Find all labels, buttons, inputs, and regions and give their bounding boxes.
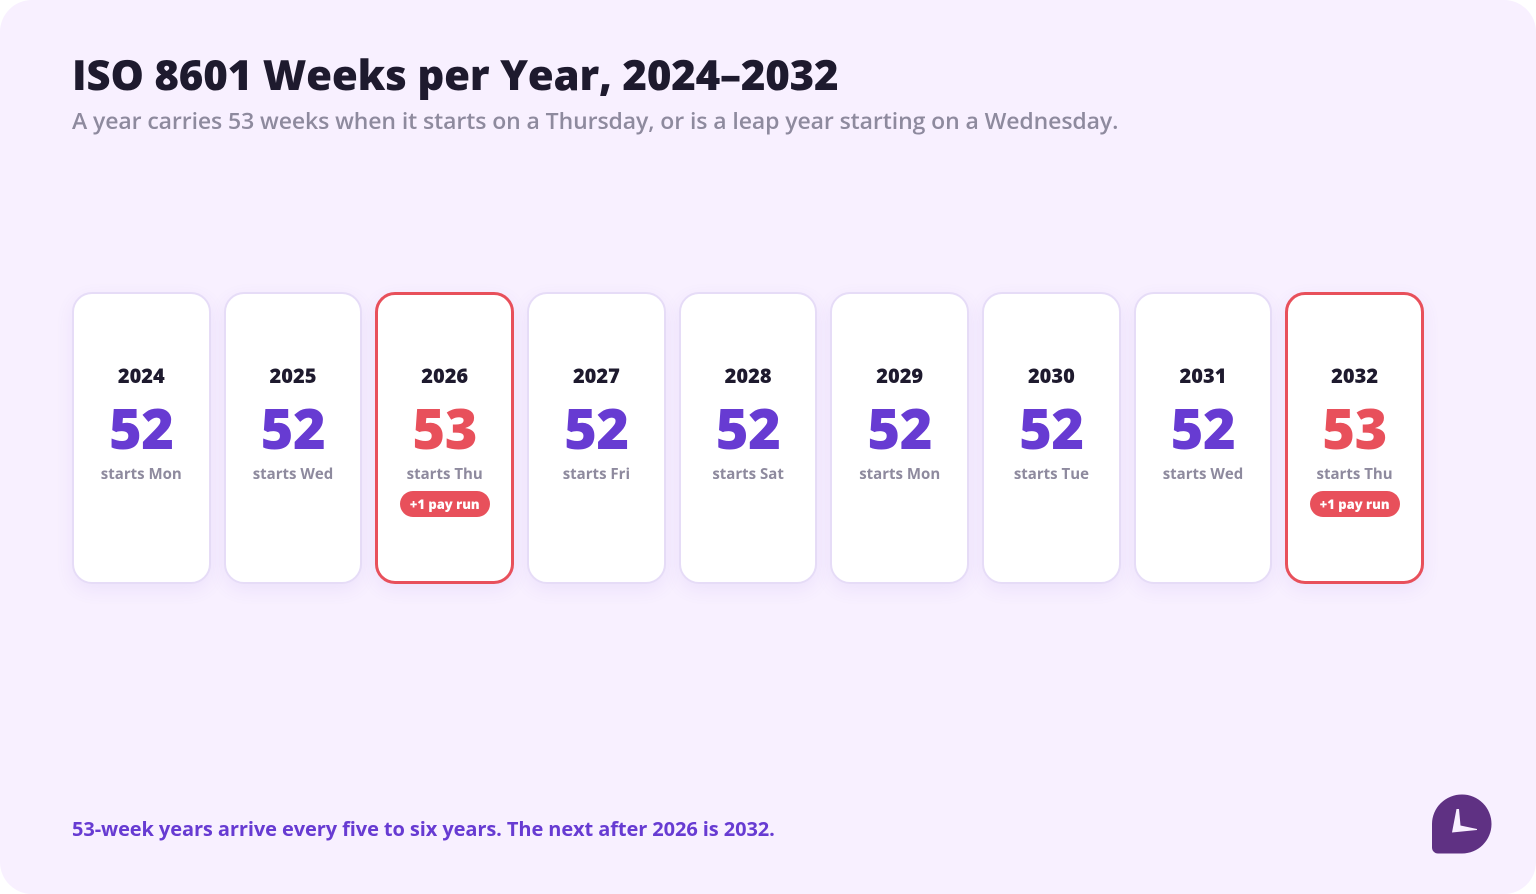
card: 2024: starts Mon [101, 464, 182, 484]
card: 2028: starts Sat [712, 464, 784, 484]
card: 2027: 52 [564, 390, 629, 466]
card: 2031 [1134, 292, 1272, 584]
footer takeaway: 53-week years arrive every five to six years. The next after 2026 is 2032. [72, 815, 775, 842]
card: 2031: 2031 [1180, 362, 1226, 389]
card: 2027: starts Fri [563, 464, 630, 484]
card: 2029: starts Mon [859, 464, 940, 484]
card: 2032 highlighted: +1 pay run [1320, 495, 1390, 513]
card: 2026 highlighted: 53 [412, 390, 477, 466]
card: 2029 [830, 292, 969, 584]
card: 2030: 52 [1019, 390, 1084, 466]
title: ISO 8601 Weeks per Year, 2024–2032 [72, 46, 838, 103]
card: 2030: 2030 [1028, 362, 1075, 389]
card: 2029: 52 [867, 390, 932, 466]
card: 2031: starts Wed [1163, 464, 1243, 484]
card: 2024: 2024 [118, 362, 165, 389]
card: 2031: 52 [1171, 390, 1235, 466]
card: 2026 highlighted: +1 pay run [410, 495, 480, 513]
card: 2024: 52 [109, 390, 174, 466]
card: 2028: 52 [716, 390, 780, 466]
card: 2028 [679, 292, 817, 584]
card: 2029: 2029 [876, 362, 923, 389]
card: 2032 highlighted: 2032 [1331, 362, 1378, 389]
card: 2025: 2025 [270, 362, 316, 389]
card: 2032 highlighted: 53 [1322, 390, 1387, 466]
card: 2027: 2027 [573, 362, 620, 389]
card: 2032 highlighted: starts Thu [1317, 464, 1393, 484]
card: 2026 highlighted: starts Thu [407, 464, 483, 484]
card: 2026 highlighted: 2026 [421, 362, 468, 389]
card: 2024 [72, 292, 211, 584]
card: 2030: starts Tue [1014, 464, 1089, 484]
card: 2027 [527, 292, 666, 584]
card: 2032 highlighted [1285, 292, 1424, 584]
card: 2025: 52 [261, 390, 325, 466]
card: 2028: 2028 [725, 362, 772, 389]
card: 2025: starts Wed [253, 464, 333, 484]
icon: clock logo [1432, 794, 1492, 854]
card: 2026 highlighted [375, 292, 514, 584]
card: 2025 [224, 292, 362, 584]
card: 2030 [982, 292, 1121, 584]
subtitle: A year carries 53 weeks when it starts on a Thursday, or is a leap year starting on a Wednesday. [72, 104, 1118, 136]
